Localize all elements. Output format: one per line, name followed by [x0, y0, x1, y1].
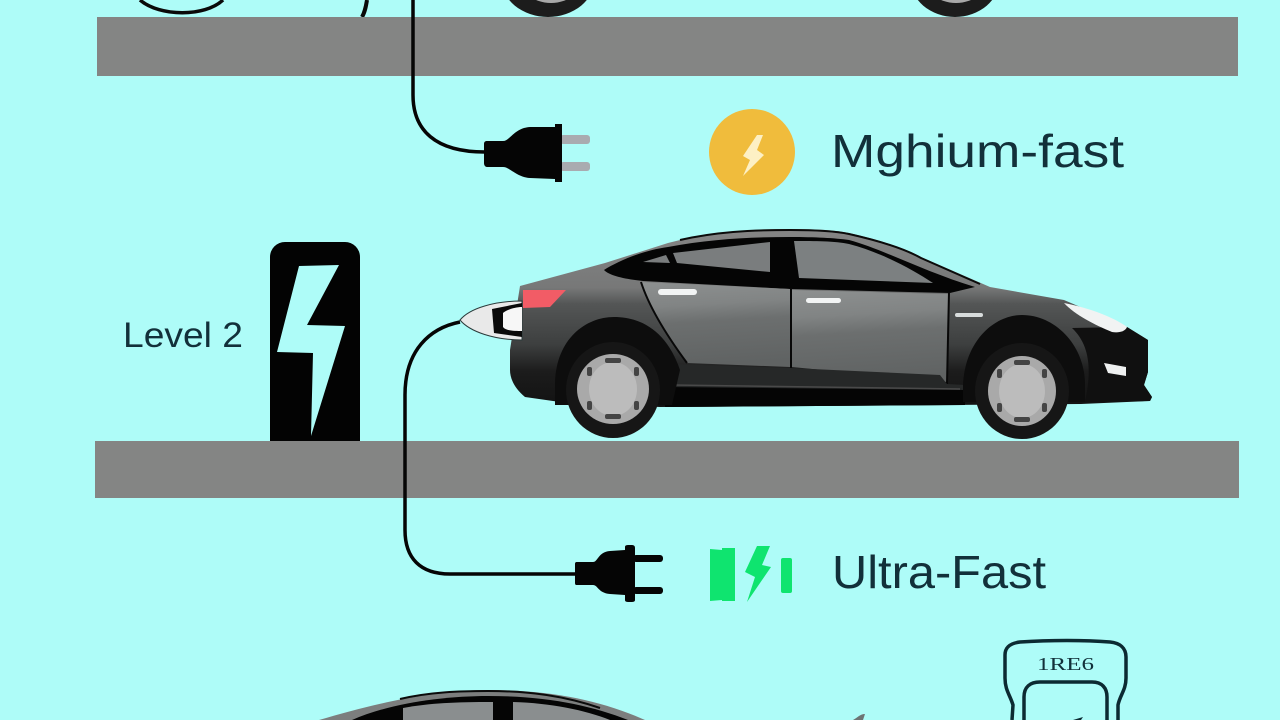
front window glass: [794, 241, 933, 283]
door seams: [641, 282, 949, 384]
icon: plug, ultra-fast: [575, 545, 663, 602]
bottom car: partial roof: [319, 690, 645, 720]
lower sill: [665, 364, 965, 407]
sill highlight: [672, 385, 960, 389]
front wheel: [975, 343, 1069, 439]
tail light: [523, 290, 566, 308]
label: ultra-fast: Ultra-Fast: [832, 546, 1046, 598]
label: medium-fast: Mghium-fast: [831, 125, 1124, 177]
rear door: [641, 282, 790, 367]
car: main grey sedan: [510, 229, 1152, 439]
rear wheel: [566, 342, 660, 438]
icon: bottom charging station: [1005, 640, 1126, 720]
label: level 2: Level 2: [123, 316, 243, 355]
sill black: [665, 387, 965, 407]
cable: top plug: [413, 0, 485, 152]
fog light: [1104, 363, 1126, 376]
window band: [604, 237, 975, 293]
wheel arches: [555, 315, 1085, 405]
road strip: middle: [95, 441, 1239, 498]
icon: medium-fast coin: [709, 109, 795, 195]
door handles and mirror: [658, 289, 983, 317]
headlight: [1064, 303, 1127, 332]
icon: level 2 charger block: [270, 242, 360, 441]
car body: [510, 229, 1152, 407]
front bumper: [1072, 327, 1152, 402]
charging connector: [460, 301, 522, 340]
front door: [792, 290, 949, 382]
icon: ultra-fast green battery: [710, 546, 792, 602]
roof line: [680, 230, 980, 284]
road strip: top: [97, 17, 1238, 76]
icon: bottom charging station: 1RE6: [1037, 654, 1094, 674]
icon: grey spike: [853, 714, 865, 720]
rear window glass: [643, 242, 770, 272]
top scene: partial car wheels and cables: [140, 0, 1000, 17]
cable: lower plug: [405, 322, 576, 574]
icon: plug, medium-fast: [484, 124, 590, 182]
